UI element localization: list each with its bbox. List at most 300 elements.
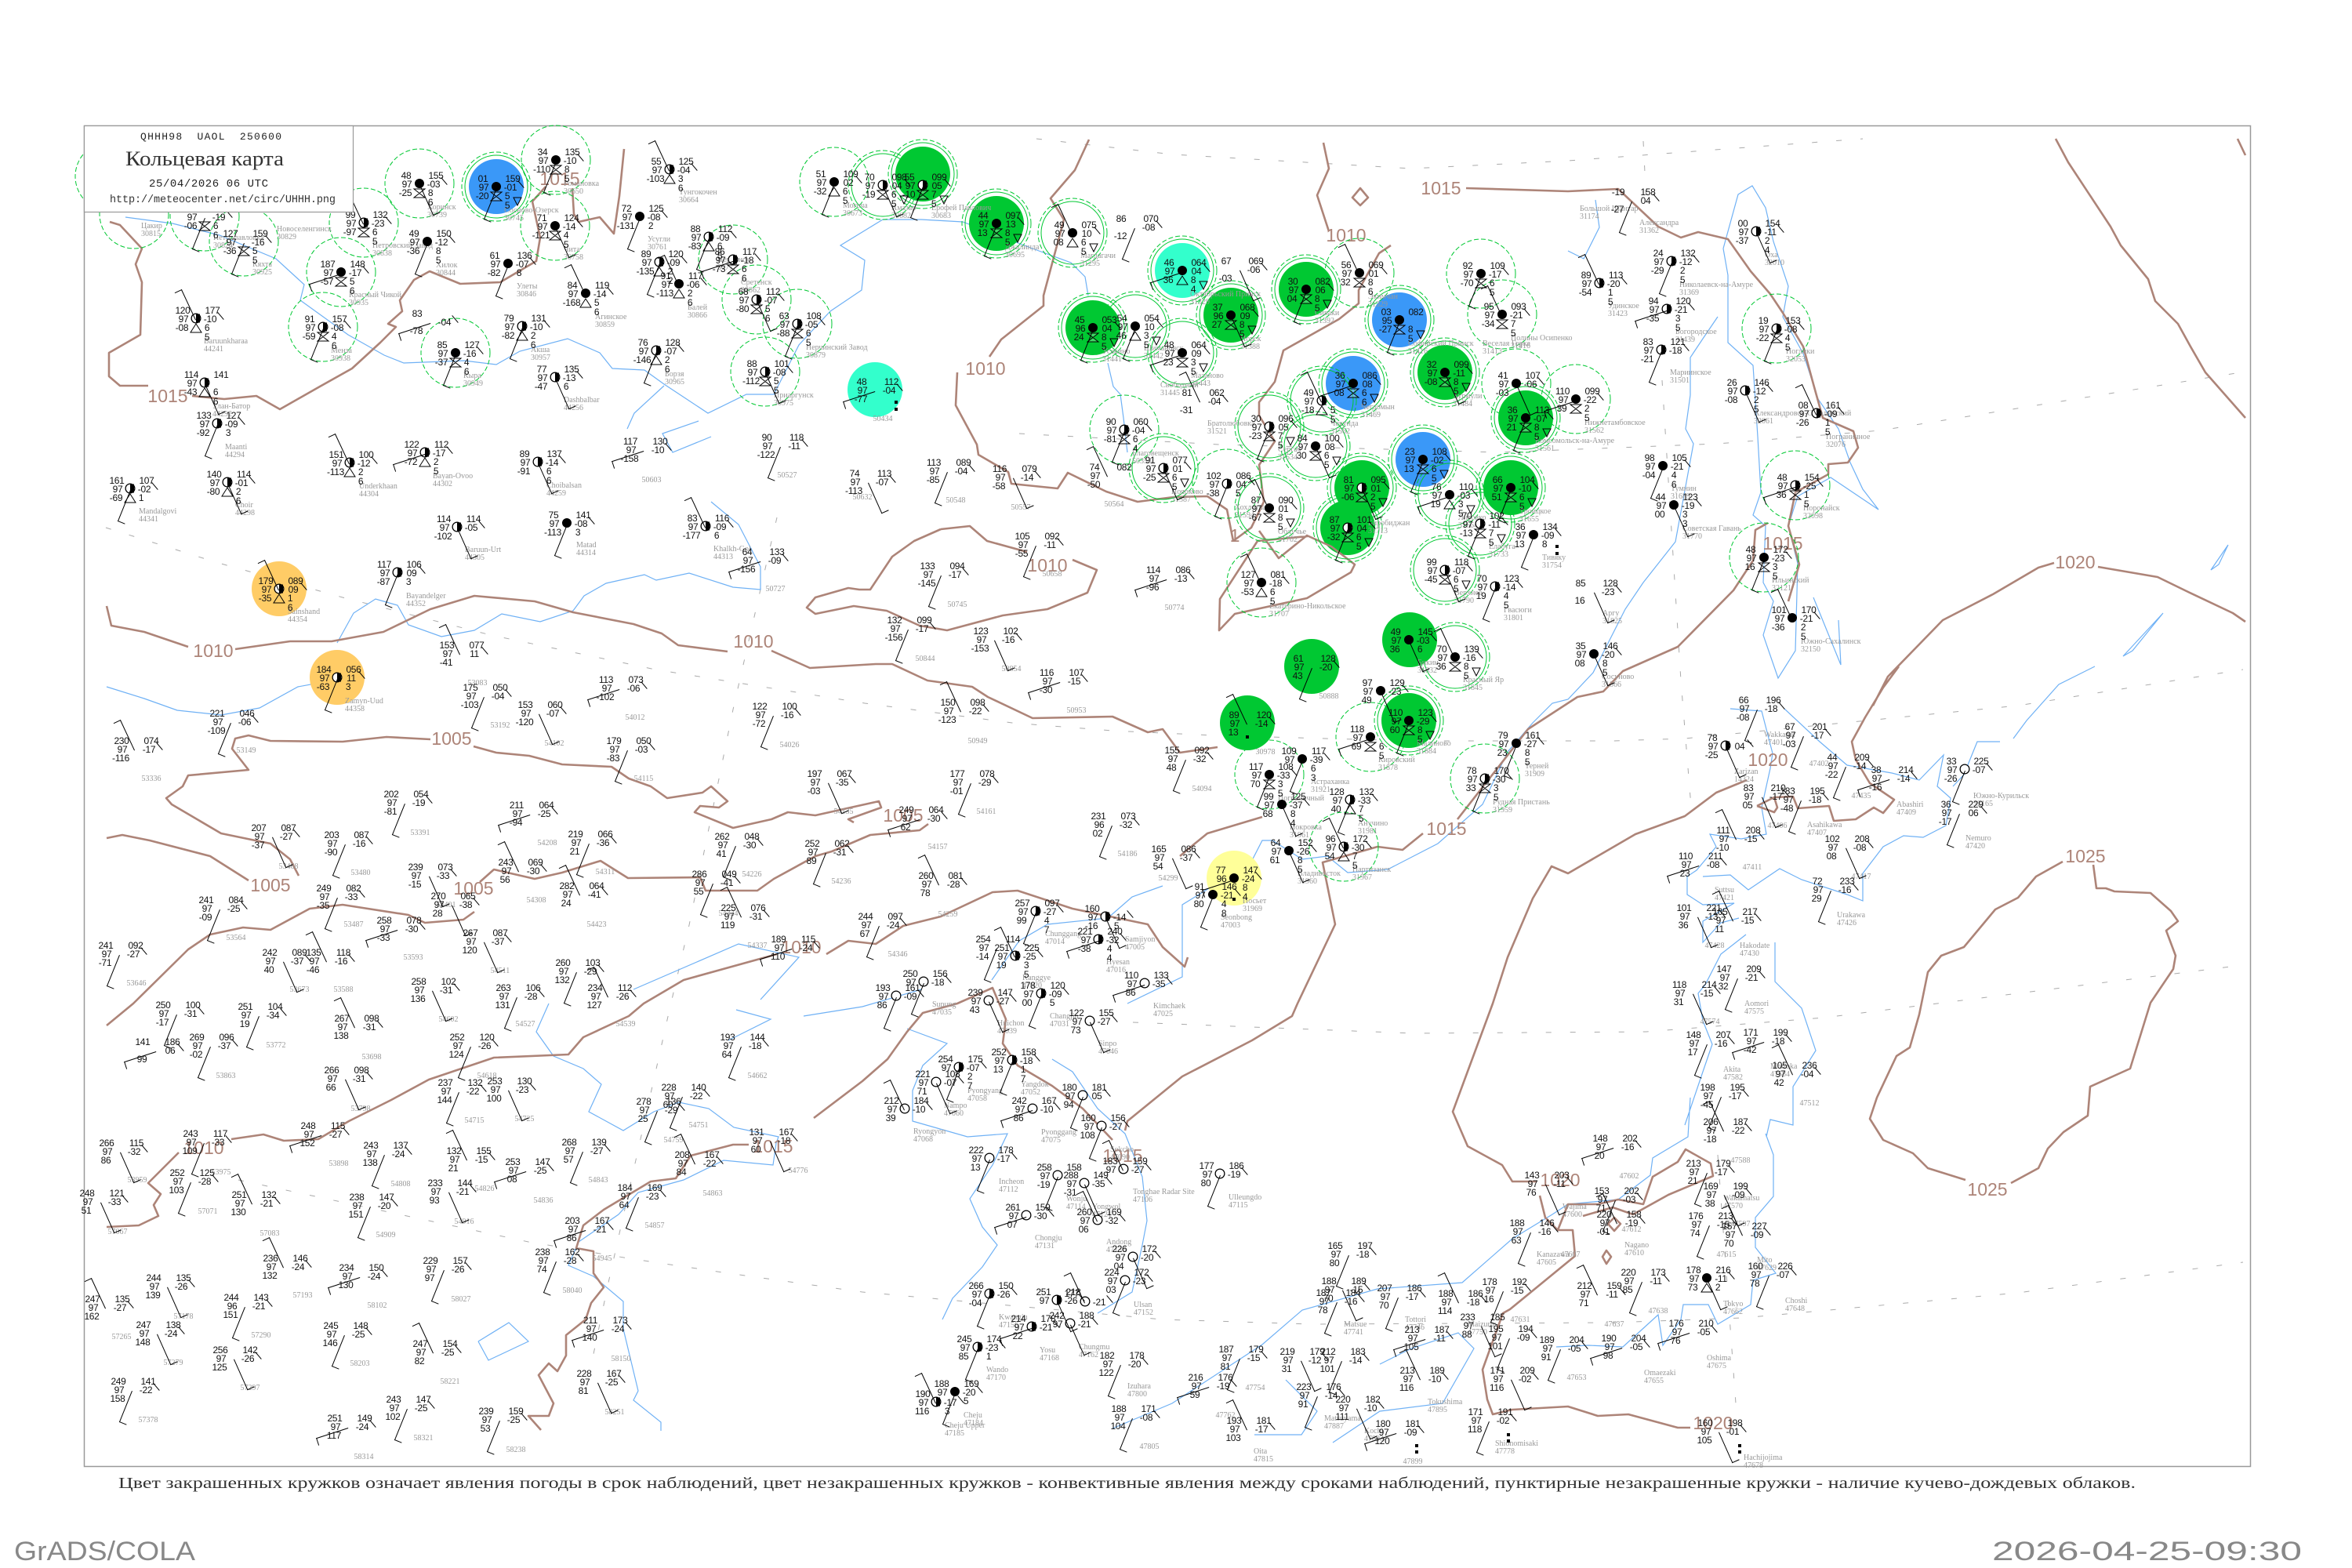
station plots: temperature, pressure, dew point, tendency and cloud values: 082 (1315, 276, 1330, 287)
station-only WMO numbers: 47653 (1566, 1374, 1587, 1382)
station plots: temperature, pressure, dew point, tendency and cloud values: 114 (1438, 1305, 1452, 1316)
station plots: temperature, pressure, dew point, tendency and cloud values: 244 (858, 911, 873, 922)
station plots: temperature, pressure, dew point, tendency and cloud values: 70 (1379, 1300, 1388, 1311)
station names and WMO numbers: 47893 (1364, 1435, 1384, 1443)
station plots: temperature, pressure, dew point, tendency and cloud values: 5 (1584, 412, 1589, 423)
station plots: temperature, pressure, dew point, tendency and cloud values: 97 (1600, 1218, 1610, 1229)
station plots: temperature, pressure, dew point, tendency and cloud values: -16 (335, 956, 347, 967)
station plots: temperature, pressure, dew point, tendency and cloud values: 89 (520, 448, 529, 459)
station names and WMO numbers: 47778 (1495, 1447, 1515, 1456)
station plots: temperature, pressure, dew point, tendency and cloud values: 3 (1458, 499, 1463, 510)
station-only WMO numbers: 58321 (414, 1434, 433, 1443)
station plots: temperature, pressure, dew point, tendency and cloud values: -26 (1065, 1295, 1077, 1306)
station plots: temperature, pressure, dew point, tendency and cloud values: 221 (1077, 926, 1093, 937)
station plots: temperature, pressure, dew point, tendency and cloud values: -15 (1741, 915, 1754, 926)
station plots: temperature, pressure, dew point, tendency and cloud values: 169 (1106, 1207, 1122, 1218)
station plots: temperature, pressure, dew point, tendency and cloud values: -12 (1753, 386, 1766, 397)
station plots: temperature, pressure, dew point, tendency and cloud values: 97 (891, 623, 900, 634)
station plots: temperature, pressure, dew point, tendency and cloud values: 97 (944, 706, 953, 717)
isobar value labels: 1020 (1540, 1170, 1581, 1190)
station plots: temperature, pressure, dew point, tendency and cloud values: 110 (1388, 707, 1403, 718)
station plots: temperature, pressure, dew point, tendency and cloud values: 147 (1716, 964, 1732, 975)
station plots: temperature, pressure, dew point, tendency and cloud values: 086 (1362, 370, 1377, 381)
station names and WMO numbers: Петровский Завод (372, 241, 433, 250)
station plots: temperature, pressure, dew point, tendency and cloud values: 144 (457, 1178, 473, 1189)
station plots: temperature, pressure, dew point, tendency and cloud values: 6 (213, 387, 218, 397)
station plots: temperature, pressure, dew point, tendency and cloud values: 6 (1379, 741, 1384, 752)
station plots: temperature, pressure, dew point, tendency and cloud values: 064 (1191, 339, 1207, 350)
station plots: temperature, pressure, dew point, tendency and cloud values: 6 (372, 227, 377, 238)
station plots: temperature, pressure, dew point, tendency and cloud values: 97 (591, 991, 601, 1002)
station names and WMO numbers: Малиново (1417, 739, 1451, 748)
station plots: temperature, pressure, dew point, tendency and cloud values: 91 (1541, 1352, 1551, 1363)
station plots: temperature, pressure, dew point, tendency and cloud values: 7 (967, 1080, 972, 1091)
station plots: temperature, pressure, dew point, tendency and cloud values: 196 (1766, 695, 1781, 706)
station names and WMO numbers: 30938 (331, 354, 350, 363)
station names and WMO numbers: Pyonggang (1041, 1128, 1076, 1137)
station plots: temperature, pressure, dew point, tendency and cloud values: 99 (137, 1054, 147, 1065)
station plots: temperature, pressure, dew point, tendency and cloud values: 195 (1730, 1082, 1745, 1093)
station plots: temperature, pressure, dew point, tendency and cloud values: -22 (1584, 394, 1596, 405)
station plots: temperature, pressure, dew point, tendency and cloud values: -17 (1406, 1291, 1418, 1302)
station plots: temperature, pressure, dew point, tendency and cloud values: 40 (1331, 804, 1341, 815)
station plots: temperature, pressure, dew point, tendency and cloud values: -70 (1461, 278, 1473, 289)
station-only WMO numbers: 53863 (216, 1072, 235, 1080)
station plots: temperature, pressure, dew point, tendency and cloud values: 97 (1363, 677, 1372, 688)
station plots: temperature, pressure, dew point, tendency and cloud values: -41 (720, 877, 733, 888)
station plots: temperature, pressure, dew point, tendency and cloud values: 97 (241, 1010, 251, 1021)
station-only WMO numbers: 47607 (1560, 1250, 1581, 1259)
station plots: temperature, pressure, dew point, tendency and cloud values: 54 (1153, 861, 1163, 872)
station plots: temperature, pressure, dew point, tendency and cloud values: -08 (1425, 376, 1437, 387)
station plots: temperature, pressure, dew point, tendency and cloud values: 97 (255, 831, 264, 842)
station plots: temperature, pressure, dew point, tendency and cloud values: 194 (1518, 1323, 1534, 1334)
station plots: temperature, pressure, dew point, tendency and cloud values: 066 (597, 829, 613, 840)
station plots: temperature, pressure, dew point, tendency and cloud values: 170 (1801, 604, 1817, 615)
station plots: temperature, pressure, dew point, tendency and cloud values: 00 (1738, 218, 1748, 229)
station names and WMO numbers: Kochi (1364, 1427, 1384, 1436)
station plots: temperature, pressure, dew point, tendency and cloud values: 211 (510, 800, 524, 811)
station plots: temperature, pressure, dew point, tendency and cloud values: 83 (1643, 336, 1653, 347)
station plots: temperature, pressure, dew point, tendency and cloud values: 49 (1054, 220, 1064, 230)
station-only WMO numbers: 50564 (1104, 500, 1124, 509)
station names and WMO numbers: 31959 (1493, 806, 1512, 815)
station plots: temperature, pressure, dew point, tendency and cloud values: -06 (1341, 492, 1354, 503)
station-only WMO numbers: 47754 (1245, 1384, 1265, 1392)
station plots: temperature, pressure, dew point, tendency and cloud values: -39 (1310, 754, 1323, 765)
station plots: temperature, pressure, dew point, tendency and cloud values: 115 (801, 934, 815, 945)
station plots: temperature, pressure, dew point, tendency and cloud values: 08 (1363, 379, 1372, 390)
station plots: temperature, pressure, dew point, tendency and cloud values: 121 (1670, 336, 1686, 347)
station plots: temperature, pressure, dew point, tendency and cloud values: -17 (1939, 816, 1951, 827)
station plots: temperature, pressure, dew point, tendency and cloud values: 97 (972, 1153, 982, 1164)
station plots: temperature, pressure, dew point, tendency and cloud values: 5 (1330, 405, 1335, 416)
station plots: temperature, pressure, dew point, tendency and cloud values: 5 (806, 337, 811, 348)
station plots: temperature, pressure, dew point, tendency and cloud values: 97 (1319, 1296, 1329, 1307)
station plots: temperature, pressure, dew point, tendency and cloud values: 71 (537, 212, 546, 223)
station plots: temperature, pressure, dew point, tendency and cloud values: 97 (1720, 972, 1730, 983)
station plots: temperature, pressure, dew point, tendency and cloud values: 132 (446, 1145, 462, 1156)
station plots: temperature, pressure, dew point, tendency and cloud values: 68 (1263, 808, 1272, 819)
station plots: temperature, pressure, dew point, tendency and cloud values: 248 (300, 1120, 316, 1131)
station plots: temperature, pressure, dew point, tendency and cloud values: 213 (1686, 1158, 1701, 1169)
station plots: temperature, pressure, dew point, tendency and cloud values: 169 (647, 1182, 662, 1193)
station plots: temperature, pressure, dew point, tendency and cloud values: -109 (208, 725, 225, 736)
station plots: temperature, pressure, dew point, tendency and cloud values: -15 (1511, 1285, 1523, 1296)
station plots: temperature, pressure, dew point, tendency and cloud values: -16 (1002, 634, 1014, 645)
station names and WMO numbers: 47582 (1723, 1073, 1743, 1082)
station names and WMO numbers: Tokushima (1428, 1398, 1463, 1406)
station plots: temperature, pressure, dew point, tendency and cloud values: 053 (1102, 314, 1117, 325)
station plots: temperature, pressure, dew point, tendency and cloud values: 97 (450, 1154, 459, 1165)
station plots: temperature, pressure, dew point, tendency and cloud values: 5 (1773, 571, 1777, 582)
isobar value labels: 1020 (1693, 1413, 1733, 1433)
station names and WMO numbers: 31362 (1639, 227, 1659, 235)
station plots: temperature, pressure, dew point, tendency and cloud values: -14 (1113, 912, 1126, 923)
station-only WMO numbers: 54751 (688, 1121, 709, 1130)
station plots: temperature, pressure, dew point, tendency and cloud values: 08 (1325, 441, 1334, 452)
station plots: temperature, pressure, dew point, tendency and cloud values: -04 (1208, 396, 1221, 407)
station plots: temperature, pressure, dew point, tendency and cloud values: 214 (1011, 1313, 1026, 1324)
station plots: temperature, pressure, dew point, tendency and cloud values: 49 (409, 228, 419, 239)
station plots: temperature, pressure, dew point, tendency and cloud values: -24 (887, 920, 899, 931)
station names and WMO numbers: Hachijojima (1744, 1454, 1783, 1462)
station plots: temperature, pressure, dew point, tendency and cloud values: 238 (349, 1192, 365, 1203)
station plots: temperature, pressure, dew point, tendency and cloud values: -103 (647, 173, 664, 184)
station plots: temperature, pressure, dew point, tendency and cloud values: 75 (549, 510, 558, 521)
station names and WMO numbers: 31967 (1352, 873, 1372, 882)
station plots: temperature, pressure, dew point, tendency and cloud values: 97 (521, 708, 531, 719)
station names and WMO numbers: Asahikawa (1807, 821, 1842, 829)
station-only WMO numbers: 54945 (593, 1254, 612, 1263)
station plots: temperature, pressure, dew point, tendency and cloud values: 243 (363, 1140, 379, 1151)
station-only WMO numbers: 54236 (831, 877, 851, 886)
station names and WMO numbers: 44358 (345, 705, 365, 713)
station plots: temperature, pressure, dew point, tendency and cloud values: 123 (973, 626, 989, 637)
station plots: temperature, pressure, dew point, tendency and cloud values: 062 (834, 838, 850, 849)
station names and WMO numbers: 47058 (967, 1094, 987, 1103)
station plots: temperature, pressure, dew point, tendency and cloud values: -25 (538, 808, 550, 819)
station plots: temperature, pressure, dew point, tendency and cloud values: -36 (223, 245, 236, 256)
station plots: temperature, pressure, dew point, tendency and cloud values: 97 (410, 237, 419, 248)
station names and WMO numbers: 31469 (1361, 411, 1381, 419)
station plots: temperature, pressure, dew point, tendency and cloud values: 51 (82, 1205, 91, 1216)
station names and WMO numbers: Чегдомын (1361, 403, 1395, 412)
station plots: temperature, pressure, dew point, tendency and cloud values: 187 (1434, 1324, 1450, 1335)
station plots: temperature, pressure, dew point, tendency and cloud values: 082 (1116, 462, 1132, 473)
isobar value labels: 1015 (147, 386, 188, 406)
station names and WMO numbers: Zamyn-Uud (345, 697, 383, 706)
station plots: temperature, pressure, dew point, tendency and cloud values: -04 (492, 691, 504, 702)
station plots: temperature, pressure, dew point, tendency and cloud values: -30 (1040, 684, 1052, 695)
station plots: temperature, pressure, dew point, tendency and cloud values: 6 (688, 297, 692, 308)
station plots: temperature, pressure, dew point, tendency and cloud values: -03 (1783, 739, 1795, 750)
station plots: temperature, pressure, dew point, tendency and cloud values: 5 (1278, 440, 1283, 451)
station plots: temperature, pressure, dew point, tendency and cloud values: 204 (1569, 1334, 1584, 1345)
station-only WMO numbers: 57265 (111, 1333, 132, 1341)
station names and WMO numbers: 47426 (1837, 919, 1857, 927)
station plots: temperature, pressure, dew point, tendency and cloud values: 49 (1304, 387, 1313, 398)
station plots: temperature, pressure, dew point, tendency and cloud values: -13 (563, 372, 575, 383)
station plots: temperature, pressure, dew point, tendency and cloud values: 102 (385, 1411, 401, 1422)
station plots: temperature, pressure, dew point, tendency and cloud values: -24 (165, 1328, 177, 1339)
station plots: temperature, pressure, dew point, tendency and cloud values: 5 (1379, 750, 1384, 761)
station plots: temperature, pressure, dew point, tendency and cloud values: -01 (1597, 1226, 1610, 1237)
station names and WMO numbers: Chungmu (1079, 1343, 1109, 1352)
station-only WMO numbers: 54012 (626, 713, 644, 722)
station plots: temperature, pressure, dew point, tendency and cloud values: -07 (1453, 565, 1465, 576)
station plots: temperature, pressure, dew point, tendency and cloud values: 56 (500, 874, 510, 885)
station plots: temperature, pressure, dew point, tendency and cloud values: 76 (1671, 1335, 1680, 1346)
station plots: temperature, pressure, dew point, tendency and cloud values: 131 (531, 313, 546, 324)
station-only WMO numbers: 53898 (329, 1160, 348, 1168)
station plots: temperature, pressure, dew point, tendency and cloud values: 247 (85, 1294, 100, 1305)
station plots: temperature, pressure, dew point, tendency and cloud values: 97 (306, 322, 315, 333)
station plots: temperature, pressure, dew point, tendency and cloud values: 288 (1063, 1170, 1079, 1181)
station plots: temperature, pressure, dew point, tendency and cloud values: 97 (387, 797, 397, 808)
station plots: temperature, pressure, dew point, tendency and cloud values: 13 (1229, 727, 1238, 738)
station-only WMO numbers: 54102 (544, 739, 564, 748)
station plots: temperature, pressure, dew point, tendency and cloud values: -32 (1120, 819, 1132, 830)
station plots: temperature, pressure, dew point, tendency and cloud values: -72 (405, 456, 417, 467)
station plots: temperature, pressure, dew point, tendency and cloud values: 125 (678, 156, 694, 167)
station plots: temperature, pressure, dew point, tendency and cloud values: 4 (1107, 943, 1112, 954)
station plots: temperature, pressure, dew point, tendency and cloud values: 97 (906, 180, 915, 191)
station plots: temperature, pressure, dew point, tendency and cloud values: -19 (212, 212, 225, 223)
station-only WMO numbers: 54602 (439, 1015, 458, 1024)
station plots: temperature, pressure, dew point, tendency and cloud values: 2 (1715, 1282, 1720, 1293)
station plots: temperature, pressure, dew point, tendency and cloud values: -168 (563, 297, 580, 308)
station plots: temperature, pressure, dew point, tendency and cloud values: -09 (1404, 1427, 1417, 1438)
station names and WMO numbers: 31443 (1191, 379, 1210, 388)
title box: QHHH98 UAOL 250600 (140, 131, 281, 143)
station plots: temperature, pressure, dew point, tendency and cloud values: 7 (1489, 528, 1494, 539)
station plots: temperature, pressure, dew point, tendency and cloud values: -16 (1085, 920, 1098, 931)
station names and WMO numbers: Sainshand (288, 608, 320, 616)
station plots: temperature, pressure, dew point, tendency and cloud values: 155 (476, 1145, 492, 1156)
station plots: temperature, pressure, dew point, tendency and cloud values: 08 (1054, 237, 1063, 248)
station plots: temperature, pressure, dew point, tendency and cloud values: -14 (1021, 472, 1033, 483)
station plots: temperature, pressure, dew point, tendency and cloud values: 098 (970, 697, 985, 708)
station plots: temperature, pressure, dew point, tendency and cloud values: 97 (102, 949, 111, 960)
station plots: temperature, pressure, dew point, tendency and cloud values: 2 (1370, 492, 1375, 503)
station plots: temperature, pressure, dew point, tendency and cloud values: 188 (1111, 1403, 1127, 1414)
station plots: temperature, pressure, dew point, tendency and cloud values: -05 (1697, 1327, 1710, 1338)
station-only WMO numbers: 53336 (141, 775, 162, 783)
station plots: temperature, pressure, dew point, tendency and cloud values: 5 (252, 245, 257, 256)
station plots: temperature, pressure, dew point, tendency and cloud values: 97 (200, 419, 209, 430)
station plots: temperature, pressure, dew point, tendency and cloud values: -05 (805, 319, 818, 330)
station plots: temperature, pressure, dew point, tendency and cloud values: 97 (1872, 773, 1882, 784)
station plots: temperature, pressure, dew point, tendency and cloud values: 161 (1825, 400, 1841, 411)
station plots: temperature, pressure, dew point, tendency and cloud values: -17 (143, 744, 155, 755)
station names and WMO numbers (139, 180, 2029, 1470)
station plots: temperature, pressure, dew point, tendency and cloud values: 236 (263, 1253, 278, 1264)
station plots: temperature, pressure, dew point, tendency and cloud values: 155 (1098, 1007, 1114, 1018)
station plots: temperature, pressure, dew point, tendency and cloud values: 149 (357, 1413, 372, 1424)
station plots: temperature, pressure, dew point, tendency and cloud values: 203 (324, 829, 339, 840)
station-only WMO numbers: 50527 (778, 471, 797, 480)
station names and WMO numbers: 30758 (564, 253, 583, 262)
station plots: temperature, pressure, dew point, tendency and cloud values: 188 (1321, 1276, 1337, 1287)
station plots: temperature, pressure, dew point, tendency and cloud values: 104 (1110, 1421, 1126, 1432)
station plots: temperature, pressure, dew point, tendency and cloud values: 97 (1222, 1352, 1232, 1363)
cloud cover discs: half fills (130, 169, 1820, 1402)
station plots: temperature, pressure, dew point, tendency and cloud values: 153 (1785, 315, 1801, 326)
station-only WMO numbers: 53192 (491, 721, 510, 730)
station names and WMO numbers: Choir (235, 501, 253, 510)
station names and WMO numbers: Hyesan (1106, 958, 1130, 967)
isobar value labels: 1005 (250, 875, 291, 895)
station plots: temperature, pressure, dew point, tendency and cloud values: -23 (985, 1342, 998, 1353)
station plots: temperature, pressure, dew point, tendency and cloud values: 97 (642, 257, 652, 268)
station plots: temperature, pressure, dew point, tendency and cloud values: -35 (259, 593, 271, 604)
station plots: temperature, pressure, dew point, tendency and cloud values: 132 (262, 1270, 278, 1281)
station plots: temperature, pressure, dew point, tendency and cloud values: 05 (1092, 1091, 1102, 1102)
station plots: temperature, pressure, dew point, tendency and cloud values: 046 (239, 708, 255, 719)
station plots: temperature, pressure, dew point, tendency and cloud values: 116 (1040, 667, 1054, 678)
station plots: temperature, pressure, dew point, tendency and cloud values: 156 (1110, 1112, 1126, 1123)
station plots: temperature, pressure, dew point, tendency and cloud values: -10 (1364, 1403, 1377, 1414)
station names and WMO numbers: Changjin (1050, 1012, 1079, 1021)
station names and WMO numbers: 32121 (1772, 584, 1791, 593)
station plots: temperature, pressure, dew point, tendency and cloud values: 5 (765, 303, 770, 314)
station plots: temperature, pressure, dew point, tendency and cloud values: 106 (406, 559, 422, 570)
station plots: temperature, pressure, dew point, tendency and cloud values: 97 (580, 1377, 590, 1388)
station-only WMO numbers: 54909 (376, 1231, 395, 1240)
station plots: temperature, pressure, dew point, tendency and cloud values: 113 (927, 457, 941, 468)
station plots: temperature, pressure, dew point, tendency and cloud values: -27 (329, 1129, 342, 1140)
station plots: temperature, pressure, dew point, tendency and cloud values: 5 (1489, 537, 1494, 548)
station plots: temperature, pressure, dew point, tendency and cloud values: 213 (1718, 1210, 1733, 1221)
station plots: temperature, pressure, dew point, tendency and cloud values: 46 (1116, 330, 1126, 341)
station plots: temperature, pressure, dew point, tendency and cloud values: 80 (1194, 898, 1203, 909)
station names and WMO numbers: Тунгокочен (679, 188, 717, 197)
station plots: temperature, pressure, dew point, tendency and cloud values: -11 (1606, 1289, 1618, 1300)
station plots: temperature, pressure, dew point, tendency and cloud values: 3 (1024, 960, 1029, 971)
station plots: temperature, pressure, dew point, tendency and cloud values: 01 (1279, 503, 1288, 514)
station plots: temperature, pressure, dew point, tendency and cloud values: 282 (559, 880, 575, 891)
station plots: temperature, pressure, dew point, tendency and cloud values: -21 (260, 1198, 273, 1209)
station plots: temperature, pressure, dew point, tendency and cloud values: -09 (1751, 1229, 1763, 1240)
station names and WMO numbers: Хурмули (1453, 392, 1483, 401)
station plots: temperature, pressure, dew point, tendency and cloud values: 86 (567, 1232, 576, 1243)
station plots: temperature, pressure, dew point, tendency and cloud values: 97 (775, 942, 784, 953)
station plots: temperature, pressure, dew point, tendency and cloud values: -22 (466, 1086, 479, 1097)
station plots: temperature, pressure, dew point, tendency and cloud values: -33 (437, 870, 449, 881)
station plots: temperature, pressure, dew point, tendency and cloud values: 148 (353, 1320, 368, 1331)
station plots: temperature, pressure, dew point, tendency and cloud values: 17 (1688, 1047, 1697, 1058)
station names and WMO numbers: Tottori (1405, 1316, 1426, 1324)
station plots: temperature, pressure, dew point, tendency and cloud values: 187 (1733, 1116, 1748, 1127)
cloud cover discs: full black (341, 160, 1792, 1392)
station plots: temperature, pressure, dew point, tendency and cloud values: 97 (652, 165, 662, 176)
title box (85, 125, 353, 212)
station plots: temperature, pressure, dew point, tendency and cloud values: 97 (1784, 794, 1793, 805)
station plots: temperature, pressure, dew point, tendency and cloud values: 5 (1464, 670, 1468, 681)
station plots: temperature, pressure, dew point, tendency and cloud values: -18 (749, 1040, 761, 1051)
station plots: temperature, pressure, dew point, tendency and cloud values: 5 (1785, 342, 1790, 353)
station names and WMO numbers: 47655 (1644, 1377, 1664, 1385)
station plots: temperature, pressure, dew point, tendency and cloud values: 154 (1804, 472, 1820, 483)
station-only WMO numbers: 53149 (237, 746, 256, 755)
station plots: temperature, pressure, dew point, tendency and cloud values: 97 (1053, 1319, 1062, 1330)
station names and WMO numbers: Yongwol (1092, 1203, 1120, 1211)
station plots: temperature, pressure, dew point, tendency and cloud values: -20 (476, 191, 488, 201)
station plots: temperature, pressure, dew point, tendency and cloud values: 236 (1802, 1060, 1817, 1071)
station plots: temperature, pressure, dew point, tendency and cloud values: 233 (1839, 876, 1855, 887)
station plots: temperature, pressure, dew point, tendency and cloud values: 198 (1727, 1417, 1743, 1428)
station plots: temperature, pressure, dew point, tendency and cloud values: 098 (364, 1013, 379, 1024)
station plots: temperature, pressure, dew point, tendency and cloud values: 8 (1191, 274, 1196, 285)
station names and WMO numbers: 32010 (1765, 259, 1784, 267)
station plots: temperature, pressure, dew point, tendency and cloud values: 06 (165, 1045, 175, 1056)
station names and WMO numbers: 47106 (1133, 1196, 1152, 1204)
station plots: temperature, pressure, dew point, tendency and cloud values: 5 (717, 250, 722, 261)
station plots: temperature, pressure, dew point, tendency and cloud values: 203 (564, 1215, 580, 1226)
station names and WMO numbers: 31392 (1315, 317, 1334, 325)
station plots: temperature, pressure, dew point, tendency and cloud values: 114 (1006, 934, 1020, 945)
station plots: temperature, pressure, dew point, tendency and cloud values: 68 (739, 286, 748, 297)
station plots: temperature, pressure, dew point, tendency and cloud values: 179 (606, 735, 622, 746)
station plots: temperature, pressure, dew point, tendency and cloud values: 116 (1399, 1382, 1414, 1393)
station plots: temperature, pressure, dew point, tendency and cloud values: -01 (950, 786, 963, 797)
station plots: temperature, pressure, dew point, tendency and cloud values: 073 (1120, 811, 1136, 822)
isobar value labels: 1005 (431, 728, 472, 749)
station plots: temperature, pressure, dew point, tendency and cloud values: 97 (1024, 989, 1033, 1000)
station plots: temperature, pressure, dew point, tendency and cloud values: -22 (1732, 1125, 1744, 1136)
station plots: temperature, pressure, dew point, tendency and cloud values: 128 (1320, 653, 1336, 664)
station plots: temperature, pressure, dew point, tendency and cloud values: -41 (588, 889, 601, 900)
station plots: temperature, pressure, dew point, tendency and cloud values: 97 (1108, 1276, 1117, 1287)
station plots: temperature, pressure, dew point, tendency and cloud values: 97 (1513, 1226, 1523, 1237)
station plots: temperature, pressure, dew point, tendency and cloud values: 6 (1081, 237, 1086, 248)
station plots: temperature, pressure, dew point, tendency and cloud values: 77 (1216, 865, 1225, 876)
station plots: temperature, pressure, dew point, tendency and cloud values: 97 (367, 1149, 376, 1160)
station plots: temperature, pressure, dew point, tendency and cloud values: -21 (1093, 1297, 1105, 1308)
station-only WMO numbers: 53959 (127, 1176, 147, 1185)
station plots: temperature, pressure, dew point, tendency and cloud values: 36 (1335, 370, 1345, 381)
station plots: temperature, pressure, dew point, tendency and cloud values: 6 (843, 186, 848, 197)
station names and WMO numbers: Улеты (517, 282, 538, 291)
station plots: temperature, pressure, dew point, tendency and cloud values: 69 (1352, 741, 1361, 752)
station plots: temperature, pressure, dew point, tendency and cloud values: -17 (156, 1017, 169, 1028)
station plots: temperature, pressure, dew point, tendency and cloud values: 97 (89, 1302, 98, 1313)
station plots: temperature, pressure, dew point, tendency and cloud values: 5 (774, 385, 779, 396)
station plots: temperature, pressure, dew point, tendency and cloud values: 21 (570, 846, 579, 857)
station plots: temperature, pressure, dew point, tendency and cloud values: 5 (1511, 328, 1515, 339)
station names and WMO numbers: Нижнетамбовское (1584, 419, 1646, 427)
station plots: temperature, pressure, dew point, tendency and cloud values: 97 (639, 346, 648, 357)
station plots: temperature, pressure, dew point, tendency and cloud values: 36 (1777, 489, 1786, 500)
station plots: temperature, pressure, dew point, tendency and cloud values: -123 (938, 714, 956, 725)
station plots: temperature, pressure, dew point, tendency and cloud values: 174 (986, 1334, 1002, 1345)
station names and WMO numbers: 44259 (546, 489, 566, 498)
station plots: temperature, pressure, dew point, tendency and cloud values: 127 (226, 410, 241, 421)
station plots: temperature, pressure, dew point, tendency and cloud values: 116 (915, 1406, 929, 1417)
station plots: temperature, pressure, dew point, tendency and cloud values: 73 (1071, 1025, 1080, 1036)
station names and WMO numbers: 30761 (648, 243, 667, 252)
station plots: temperature, pressure, dew point, tendency and cloud values: -37 (435, 357, 448, 368)
station plots: temperature, pressure, dew point, tendency and cloud values: 8 (1315, 293, 1319, 304)
station plots: temperature, pressure, dew point, tendency and cloud values: 130 (230, 1207, 246, 1218)
station names and WMO numbers: Кыра (463, 372, 481, 380)
station plots: temperature, pressure, dew point, tendency and cloud values: -33 (345, 891, 358, 902)
station plots: temperature, pressure, dew point, tendency and cloud values: 109 (1490, 260, 1505, 271)
station plots: temperature, pressure, dew point, tendency and cloud values: 97 (1728, 386, 1737, 397)
station plots: temperature, pressure, dew point, tendency and cloud values: -27 (280, 831, 292, 842)
station plots: temperature, pressure, dew point, tendency and cloud values: 19 (240, 1018, 249, 1029)
